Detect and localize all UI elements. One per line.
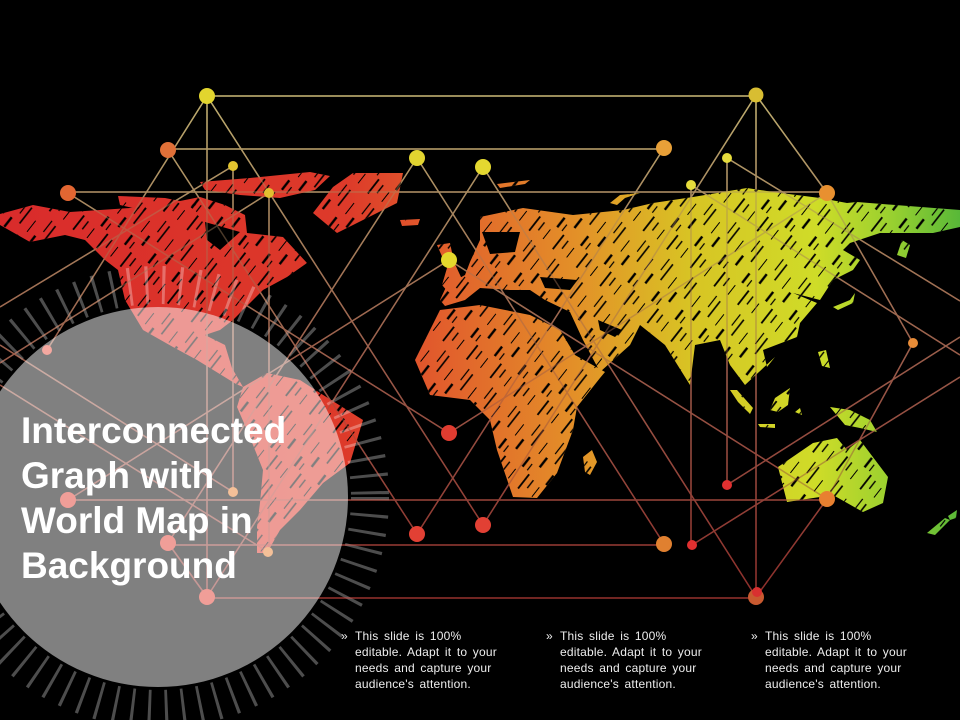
text block 3: This slide is 100% [765, 629, 871, 643]
text block 2 [546, 629, 702, 691]
text block 2: needs and capture your [560, 661, 696, 675]
circular tick ring [0, 285, 370, 709]
title: Interconnected [21, 410, 286, 451]
text block 2: » [546, 629, 553, 643]
title: World Map in [21, 500, 253, 541]
text block 3: audience's attention. [765, 677, 881, 691]
text block 2: audience's attention. [560, 677, 676, 691]
title: Background [21, 545, 237, 586]
text block 3: needs and capture your [765, 661, 902, 675]
text block 1: editable. Adapt it to your [355, 645, 497, 659]
text block 1 [341, 629, 497, 691]
world map [0, 172, 960, 553]
text block 2: editable. Adapt it to your [560, 645, 702, 659]
network nodes [42, 88, 918, 605]
text block 3: editable. Adapt it to your [765, 645, 907, 659]
text block 1: audience's attention. [355, 677, 471, 691]
title [21, 410, 286, 586]
text block 1: needs and capture your [355, 661, 492, 675]
translucent title circle [0, 307, 348, 687]
text block 2: This slide is 100% [560, 629, 666, 643]
faint network lines showing through the map [0, 95, 960, 598]
network connection lines beneath the map [0, 95, 960, 598]
text block 3: » [751, 629, 758, 643]
text block 1: » [341, 629, 348, 643]
title: Graph with [21, 455, 214, 496]
text block 3 [751, 629, 907, 691]
text block 1: This slide is 100% [355, 629, 461, 643]
